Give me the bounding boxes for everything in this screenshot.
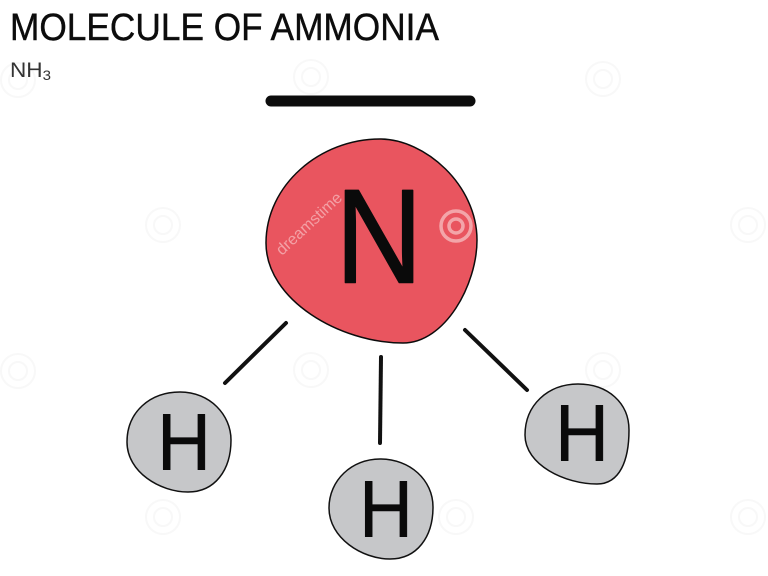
right blob (525, 384, 629, 484)
hydrogen atom middle (329, 459, 433, 559)
letter N: N (335, 163, 423, 312)
middle letter H: H (359, 465, 413, 555)
left blob (127, 392, 231, 492)
watermark spiral (441, 211, 471, 241)
formula: 3 (43, 67, 51, 83)
formula: NH (10, 59, 40, 82)
nitrogen blob (266, 139, 477, 343)
nitrogen atom (266, 139, 477, 343)
hydrogen atom left (127, 392, 231, 492)
title: MOLECULE OF AMMONIA (10, 7, 440, 49)
watermark text: dreamstime (273, 189, 346, 259)
bond middle (380, 357, 381, 443)
hydrogen atom right (525, 384, 629, 484)
lone pair bar (271, 96, 470, 106)
left letter H: H (157, 398, 211, 488)
middle blob (329, 459, 433, 559)
bond left (225, 323, 286, 383)
right letter H: H (555, 389, 609, 479)
bond right (465, 330, 527, 390)
